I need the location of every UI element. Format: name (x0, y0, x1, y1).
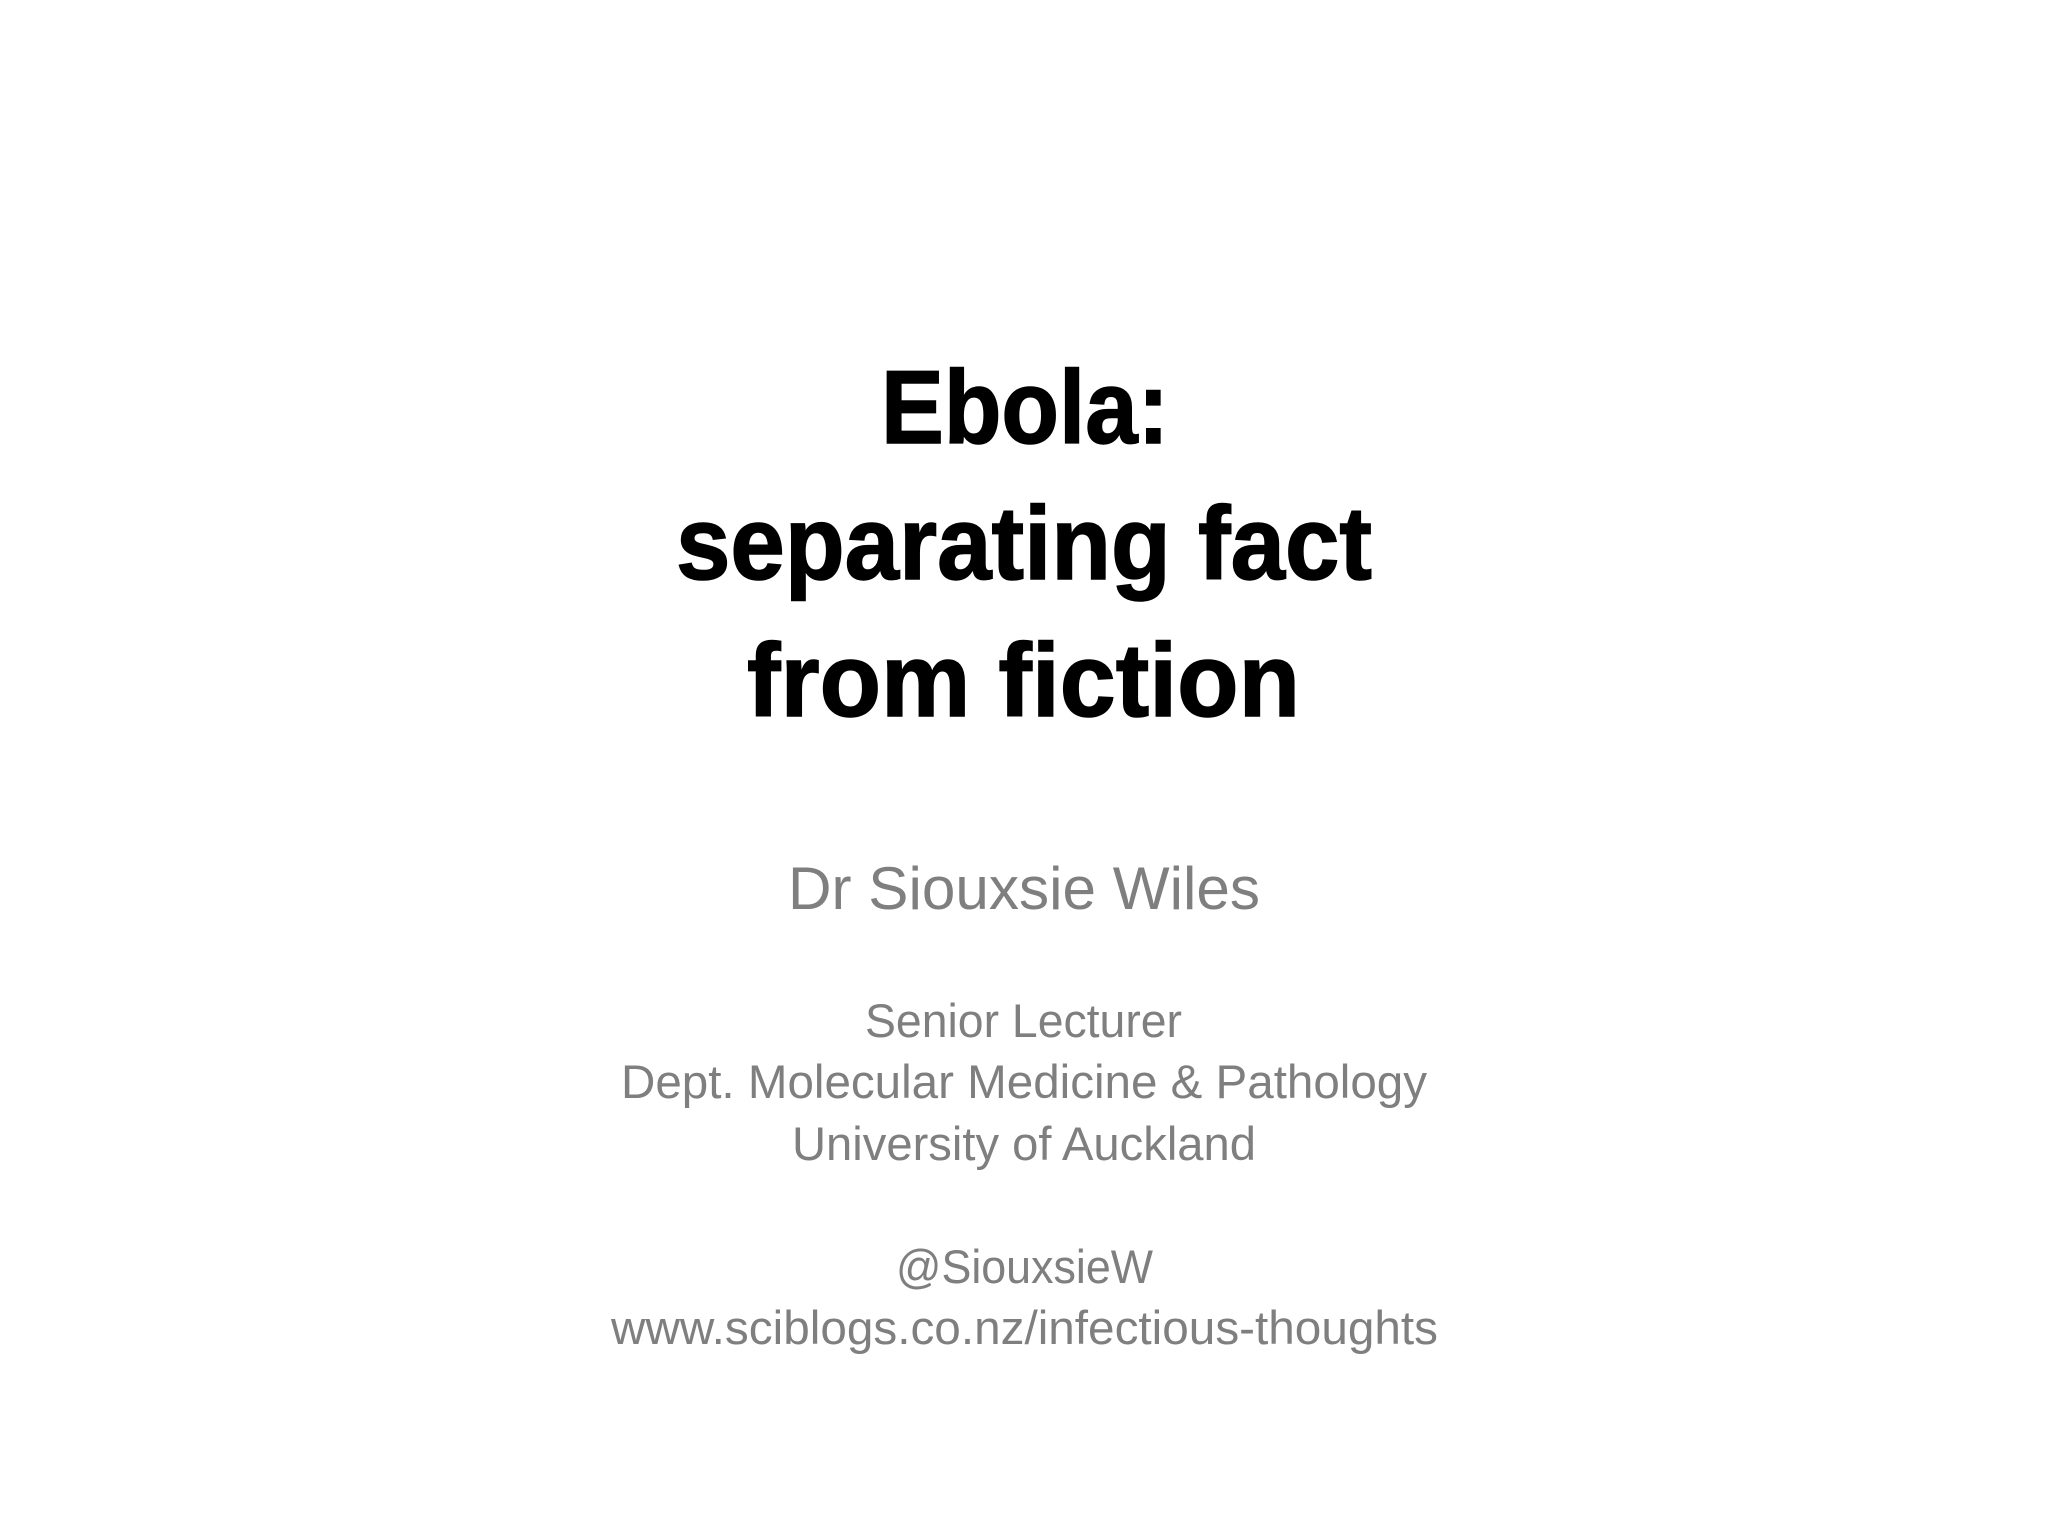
title: Ebola: (881, 350, 1169, 466)
contact details (610, 1240, 1438, 1354)
contact details: www.sciblogs.co.nz/infectious-thoughts (610, 1301, 1438, 1354)
affiliation: University of Auckland (792, 1117, 1256, 1170)
title: separating fact (676, 486, 1372, 602)
author name: Dr Siouxsie Wiles (788, 855, 1260, 922)
affiliation (621, 994, 1428, 1170)
title: from fiction (747, 623, 1300, 739)
affiliation: Senior Lecturer (865, 994, 1182, 1047)
contact details: @SiouxsieW (896, 1240, 1154, 1293)
affiliation: Dept. Molecular Medicine & Pathology (621, 1055, 1428, 1108)
title (676, 350, 1372, 739)
